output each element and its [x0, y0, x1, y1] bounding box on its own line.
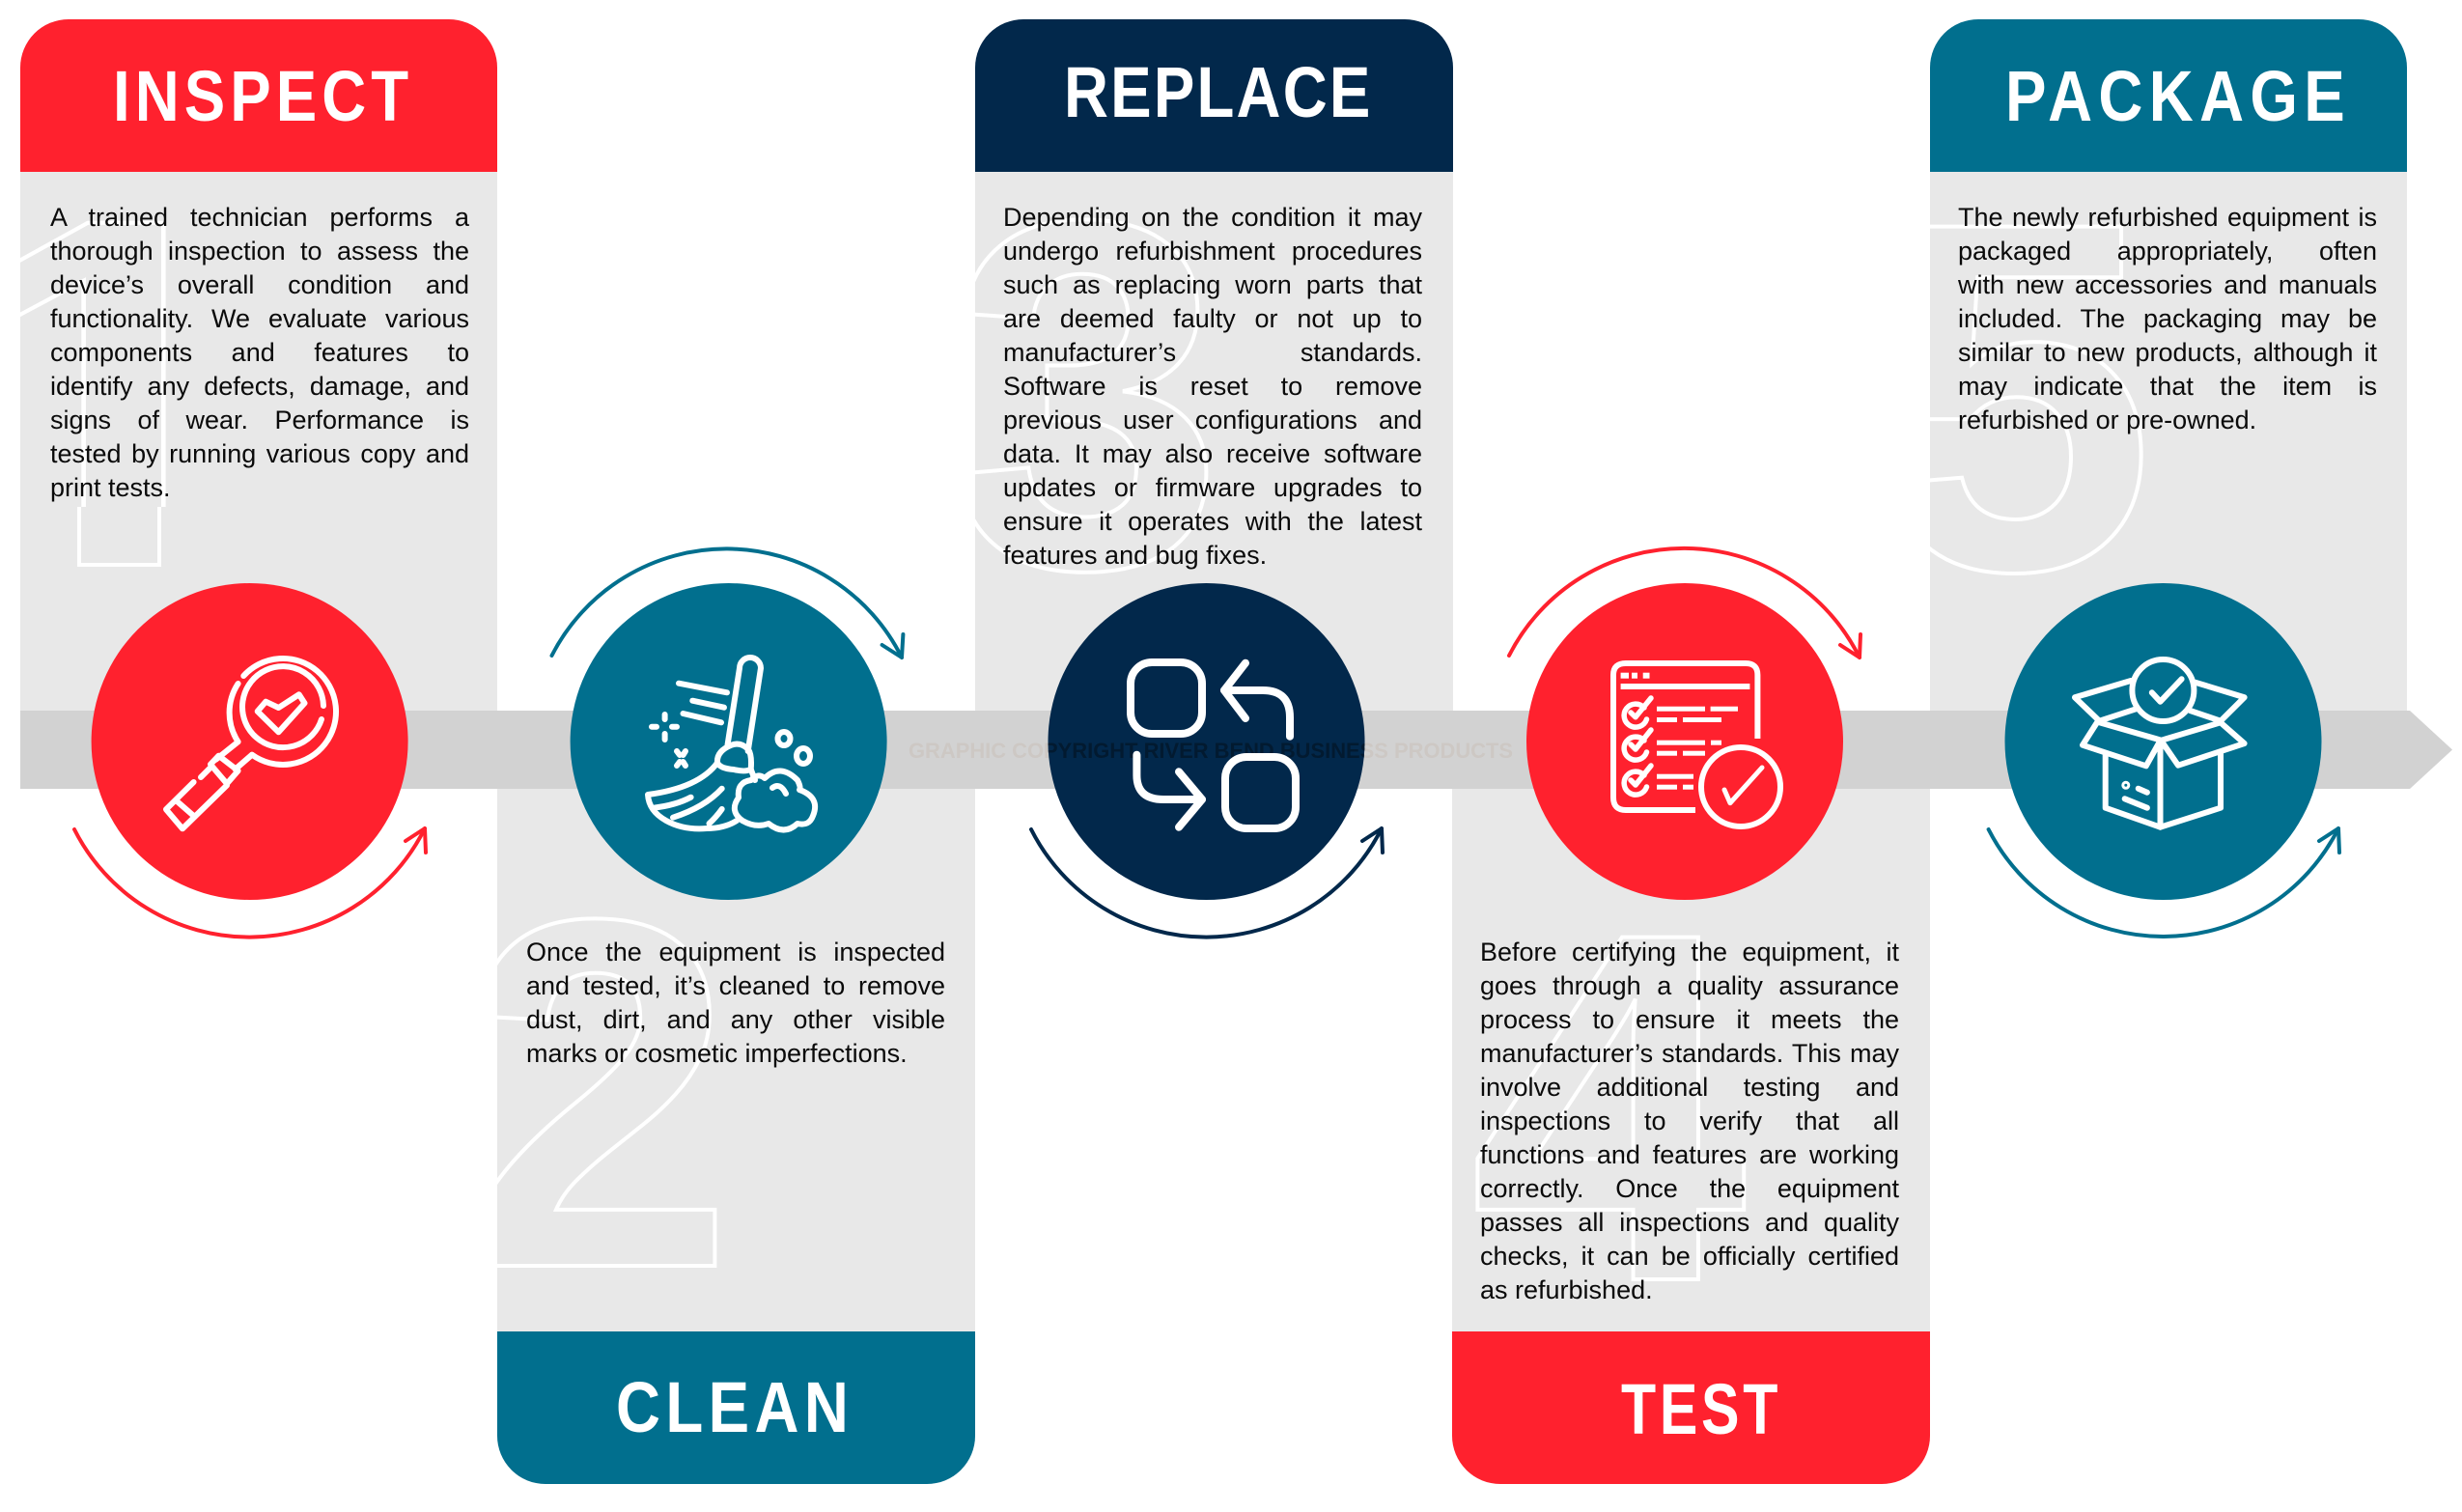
text: inspect description: functionality. We evaluate various	[50, 304, 469, 333]
heading: test: TEST	[1621, 1370, 1777, 1450]
text: replace description: such as replacing worn parts that	[1003, 270, 1422, 299]
text: inspect description: A trained technician performs a	[50, 203, 469, 232]
text: test description: correctly. Once the equipment	[1480, 1174, 1899, 1203]
text: test description	[1480, 938, 1899, 1304]
curved arrow	[552, 548, 903, 658]
text: test description: Before certifying the equipment, it	[1480, 938, 1899, 966]
panel: inspect	[20, 19, 497, 711]
text: test description: as refurbished.	[1480, 1275, 1653, 1304]
icon: magnifier with check	[166, 658, 336, 828]
text: package description: packaged appropriately, often	[1958, 237, 2377, 266]
text: replace description: updates or firmware upgrades to	[1003, 473, 1422, 502]
timeline graphics overlay	[20, 546, 2452, 939]
text: clean description: and tested, it’s cleaned to remove	[526, 971, 945, 1000]
step 4: circle and arrow	[1509, 548, 1860, 900]
text: inspect description: thorough inspection to assess the	[50, 237, 469, 266]
heading: clean: CLEAN	[616, 1368, 849, 1447]
text: package description	[1958, 203, 2377, 434]
text: test description: functions and features are working	[1480, 1140, 1899, 1169]
circle	[1526, 583, 1843, 900]
text: test description: involve additional testing and	[1480, 1073, 1899, 1102]
text: replace description: manufacturer’s standards.	[1003, 338, 1422, 367]
circle	[571, 583, 887, 900]
curved arrow	[74, 828, 426, 938]
panel: clean	[497, 789, 975, 1484]
circle	[1049, 583, 1365, 900]
text: replace description	[1003, 203, 1422, 570]
panel: test	[1452, 789, 1930, 1484]
curved arrow	[1031, 828, 1383, 938]
panel: package	[1930, 19, 2407, 711]
text: inspect description: signs of wear. Performance is	[50, 406, 469, 434]
text: package description: similar to new products, although it	[1958, 338, 2377, 367]
text: package description: The newly refurbished equipment is	[1958, 203, 2377, 232]
circle	[2004, 583, 2321, 900]
text: package description: with new accessories and manuals	[1958, 270, 2377, 299]
text: clean description: marks or cosmetic imperfections.	[526, 1039, 908, 1068]
heading: clean	[497, 1331, 975, 1484]
text: inspect description	[50, 203, 469, 502]
step 2: circle and arrow	[552, 548, 903, 900]
ghost number 4: 4	[1470, 830, 1749, 1386]
icon: broom	[648, 658, 815, 830]
text: replace description: are deemed faulty or not up to	[1003, 304, 1422, 333]
text: inspect description: tested by running various copy and	[50, 439, 469, 468]
timeline arrow band	[20, 711, 2452, 789]
text: replace description: Depending on the condition it may	[1003, 203, 1422, 232]
icon: checklist	[1613, 663, 1780, 826]
text: inspect description: device’s overall condition and	[50, 270, 469, 299]
text: replace description: ensure it operates with the latest	[1003, 507, 1422, 536]
step 1: circle and arrow	[74, 583, 426, 938]
heading: replace: REPLACE	[1064, 53, 1370, 132]
text: test description: checks, it can be officially certified	[1480, 1242, 1899, 1271]
text: clean description: Once the equipment is inspected	[526, 938, 945, 966]
text: replace description: Software is reset to remove	[1003, 372, 1422, 401]
text: package description: refurbished or pre-owned.	[1958, 406, 2256, 434]
ghost number 1	[20, 220, 166, 567]
curved arrow	[1989, 828, 2339, 937]
text: test description: goes through a quality assurance	[1480, 971, 1899, 1000]
circle	[92, 583, 408, 900]
text: test description: manufacturer’s standards. This may	[1480, 1039, 1899, 1068]
text: inspect description: components and features to	[50, 338, 469, 367]
panel: replace	[975, 19, 1453, 711]
text: replace description: data. It may also receive software	[1003, 439, 1422, 468]
heading: package	[1930, 19, 2407, 172]
text: replace description: undergo refurbishment procedures	[1003, 237, 1422, 266]
text: clean description: dust, dirt, and any other visible	[526, 1005, 945, 1034]
text: test description: inspections to verify that all	[1480, 1106, 1899, 1135]
text: inspect description: print tests.	[50, 473, 171, 502]
text: test description: process to ensure it meets the	[1480, 1005, 1899, 1034]
text: replace description: previous user configurations and	[1003, 406, 1422, 434]
step 5: circle and arrow	[1989, 583, 2339, 937]
icon: open box with check	[2075, 659, 2245, 827]
heading: package: PACKAGE	[2005, 57, 2345, 136]
text: package description: included. The packaging may be	[1958, 304, 2377, 333]
text: clean description	[526, 938, 945, 1068]
text: inspect description: identify any defects, damage, and	[50, 372, 469, 401]
text: package description: may indicate that the item is	[1958, 372, 2377, 401]
curved arrow	[1509, 548, 1860, 658]
heading: test	[1452, 1331, 1930, 1484]
text: replace description: features and bug fixes.	[1003, 541, 1267, 570]
watermark: GRAPHIC COPYRIGHT RIVER BEND BUSINESS PRODUCTS	[909, 739, 1513, 763]
heading: replace	[975, 19, 1453, 172]
heading: inspect	[20, 19, 497, 172]
text: test description: passes all inspections and quality	[1480, 1208, 1899, 1237]
icon: swap arrows	[1131, 662, 1296, 828]
watermark over circle: GRAPHIC COPYRIGHT RIVER BEND BUSINESS PRODUCTS	[909, 739, 1513, 763]
step 3: circle and arrow	[1029, 583, 1385, 939]
heading: inspect: INSPECT	[113, 57, 408, 136]
